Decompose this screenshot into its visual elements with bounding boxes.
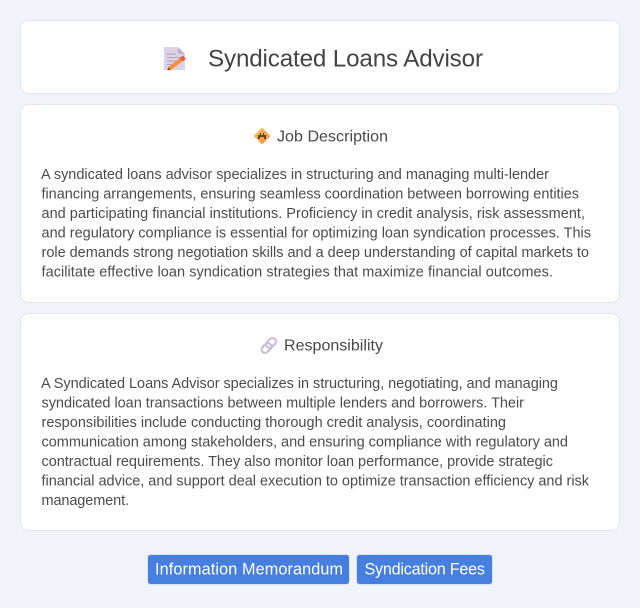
text block: responsibility: contractual requirements. They also monitor loan performance, provide strategic bbox=[42, 454, 553, 470]
text block: responsibility: A Syndicated Loans Advisor specializes in structuring, negotiating, and managing bbox=[41, 376, 558, 392]
text block: job description: and regulatory compliance is essential for optimizing loan syndication processes. This bbox=[42, 226, 591, 242]
text block: responsibility bbox=[41, 376, 590, 509]
heading: responsibility: Responsibility bbox=[284, 338, 383, 354]
title: Syndicated Loans Advisor bbox=[208, 46, 483, 72]
icon: document with pencil bbox=[164, 47, 185, 70]
text block: responsibility: management. bbox=[42, 493, 129, 509]
text block: responsibility: communication among stakeholders, and ensuring compliance with regulatory and bbox=[42, 434, 568, 450]
text block: job description: facilitate effective loan syndication strategies that maximize financial outcomes. bbox=[42, 264, 553, 280]
button: Information Memorandum bbox=[148, 554, 350, 584]
text block: responsibility: syndicated loan transactions between multiple lenders and borrowers. Their bbox=[42, 396, 524, 412]
panel: title card bbox=[20, 20, 620, 94]
button: Syndication Fees bbox=[356, 554, 492, 584]
panel: job description bbox=[20, 104, 620, 302]
heading: job description: Job Description bbox=[277, 128, 388, 146]
text block: job description: and participating financial institutions. Proficiency in credit analysis, risk assessment, bbox=[42, 206, 585, 222]
text block: responsibility: financial advice, and support deal execution to optimize transaction efficiency and risk bbox=[42, 474, 590, 490]
button: Information Memorandum: Information Memorandum bbox=[155, 560, 343, 578]
text block: job description: A syndicated loans advisor specializes in structuring and managing multi-lender bbox=[41, 167, 549, 183]
text block: job description bbox=[41, 167, 591, 280]
panel: responsibility bbox=[20, 314, 620, 530]
icon: chain link bbox=[260, 337, 277, 354]
text block: responsibility: responsibilities include conducting thorough credit analysis, coordinating bbox=[42, 415, 506, 431]
text block: job description: financing arrangements, ensuring seamless coordination between borrowing entities bbox=[42, 186, 579, 202]
text block: job description: role demands strong negotiation skills and a deep understanding of capital markets to bbox=[42, 245, 589, 261]
icon: orange diamond bbox=[255, 129, 269, 143]
button: Syndication Fees: Syndication Fees bbox=[364, 560, 485, 578]
